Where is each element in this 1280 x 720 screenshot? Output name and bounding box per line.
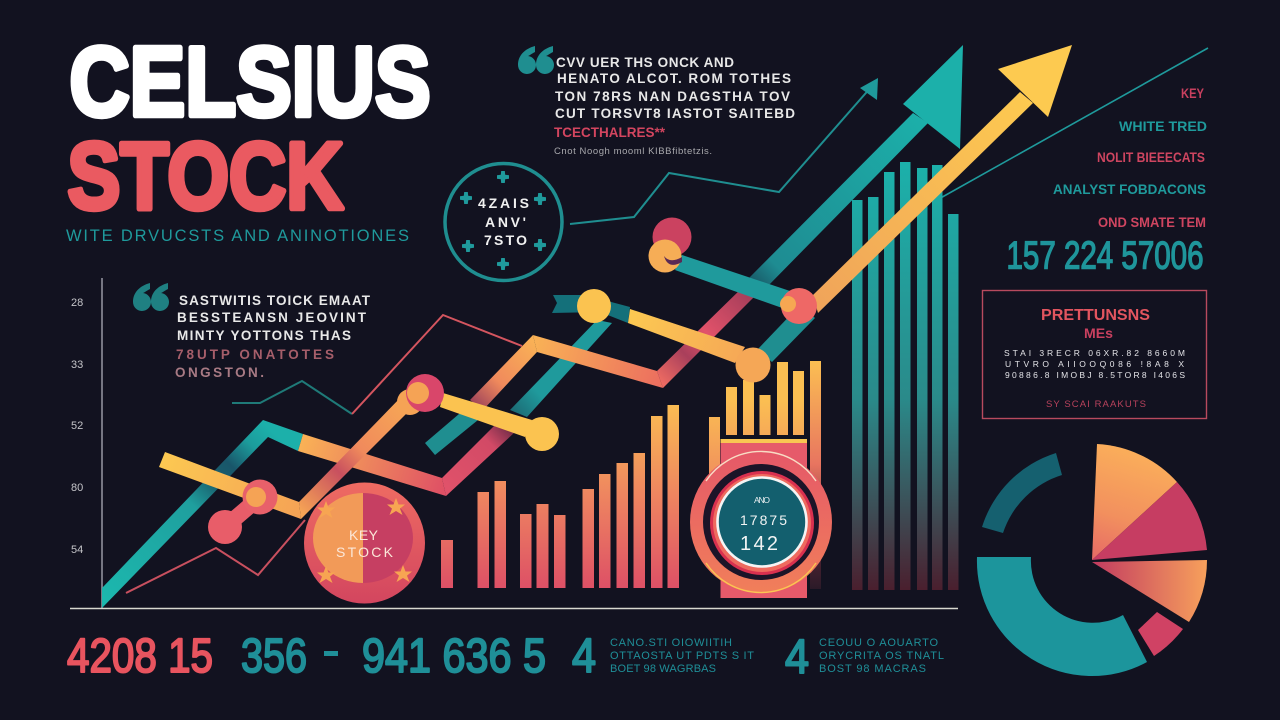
figure: right big number: 157 224 57006 <box>1006 234 1204 278</box>
thin trend line with arrow <box>570 78 878 224</box>
axis labels: 80 <box>71 482 83 494</box>
quote text: SASTWITIS TOICK EMAAT <box>179 293 371 308</box>
axes <box>70 278 958 608</box>
panel: predictions box <box>982 290 1206 418</box>
quote text: 78UTP ONATOTES <box>176 347 334 362</box>
legend: right text list <box>1053 85 1207 230</box>
bar chart: teal tall bars <box>852 162 958 590</box>
figures: bottom numbers <box>67 630 809 684</box>
bottom note two: CEOUU O AOUARTO <box>819 637 938 649</box>
quote: top <box>518 46 795 157</box>
icon: quotation mark <box>518 46 554 74</box>
figures: bottom numbers: 4 <box>572 630 596 683</box>
title: STOCK <box>68 124 344 230</box>
badge: circle annotation: 4ZAIS <box>478 195 529 211</box>
bottom note one <box>610 637 754 675</box>
bottom note one: BOET 98 WAGRBAS <box>610 663 716 675</box>
legend: right text list: NOLIT BIEEECATS <box>1097 149 1205 165</box>
connector: teal after orange node <box>757 305 815 362</box>
trend band: lower teal and crimson <box>102 420 515 608</box>
figures: bottom numbers: 4208 15 <box>67 630 213 683</box>
panel heading: PRETTUNSNS <box>1041 307 1150 324</box>
panel body text: 90886.8 IMOBJ 8.5TOR8 I406S <box>1005 370 1185 380</box>
connector: upper teal with nodes <box>648 218 817 324</box>
gauge badge: ANO <box>754 495 770 505</box>
quote: left <box>133 283 371 380</box>
bottom note two: BOST 98 MACRAS <box>819 663 926 675</box>
key stock badge: KEY <box>349 527 379 543</box>
quote text: MINTY YOTTONS THAS <box>177 328 351 343</box>
axis labels <box>71 297 83 556</box>
arrow: large yellow <box>813 45 1072 313</box>
title: CELSIUS <box>70 26 430 136</box>
quote text <box>175 293 371 380</box>
thin lines lower left <box>126 315 522 593</box>
badge: circle annotation <box>445 164 562 280</box>
key stock badge: STOCK <box>336 544 394 560</box>
gauge badge <box>690 439 832 598</box>
thin line right <box>937 48 1208 200</box>
figures: bottom numbers: 4 <box>785 631 809 684</box>
bottom note two: ORYCRITA OS TNATL <box>819 650 944 662</box>
quote text: TON 78RS NAN DAGSTHA TOV <box>555 89 790 104</box>
subtitle: WITE DRVUCSTS AND ANINOTIONES <box>66 227 409 245</box>
panel body text: UTVRO AIIOOQ086 !8A8 X <box>1005 359 1184 369</box>
figures: bottom numbers: 941 636 5 <box>362 630 546 683</box>
panel footer: SY SCAI RAAKUTS <box>1046 399 1146 410</box>
legend: right text list: OND SMATE TEM <box>1098 214 1206 230</box>
node: lower dumbbell <box>208 480 278 544</box>
legend: right text list: ANALYST FOBDACONS <box>1053 181 1206 197</box>
figures: bottom numbers: 356 <box>241 630 307 683</box>
badge: circle annotation: ANV' <box>485 214 526 230</box>
arrow: large teal <box>748 45 963 289</box>
axis labels: 28 <box>71 297 83 309</box>
bottom note one: CANO.STI OIOWIITIH <box>610 637 732 649</box>
quote text: HENATO ALCOT. ROM TOTHES <box>557 71 791 86</box>
axis labels: 33 <box>71 359 83 371</box>
trend band: main rising path <box>159 285 757 519</box>
connector: middle yellow with nodes <box>577 289 770 382</box>
badge: circle annotation: 7STO <box>484 232 527 248</box>
panel body text <box>1004 348 1185 380</box>
axis labels: 52 <box>71 420 83 432</box>
panel body text: STAI 3RECR 06XR.82 8660M <box>1004 348 1185 358</box>
quote text: BESSTEANSN JEOVINT <box>177 310 367 325</box>
bar chart: warm bars <box>441 405 679 588</box>
panel heading <box>1041 307 1150 341</box>
connector: lower yellow with nodes <box>397 374 559 451</box>
panel heading: MEs <box>1084 325 1113 341</box>
legend: right text list: KEY <box>1181 85 1205 101</box>
legend: right text list: WHITE TRED <box>1119 118 1207 134</box>
key stock badge <box>304 482 425 604</box>
quote text: CVV UER THS ONCK AND <box>556 55 734 70</box>
quote text: ONGSTON. <box>175 365 264 380</box>
pie chart <box>977 444 1207 676</box>
quote text: CUT TORSVT8 IASTOT SAITEBD <box>555 106 795 121</box>
bottom note one: OTTAOSTA UT PDTS S IT <box>610 650 754 662</box>
quote text: Cnot Noogh mooml KIBBfibtetzis. <box>554 146 712 157</box>
gauge badge: 142 <box>740 533 778 555</box>
axis labels: 54 <box>71 544 83 556</box>
title <box>68 26 430 230</box>
quote text: TCECTHALRES** <box>554 125 666 140</box>
bar chart: bars above gauge <box>709 361 821 589</box>
bottom note two <box>819 637 944 675</box>
trend band: teal middle segment <box>425 295 630 455</box>
gauge badge: 17875 <box>740 512 787 528</box>
icon: quotation mark <box>133 283 169 311</box>
quote text <box>554 55 795 157</box>
